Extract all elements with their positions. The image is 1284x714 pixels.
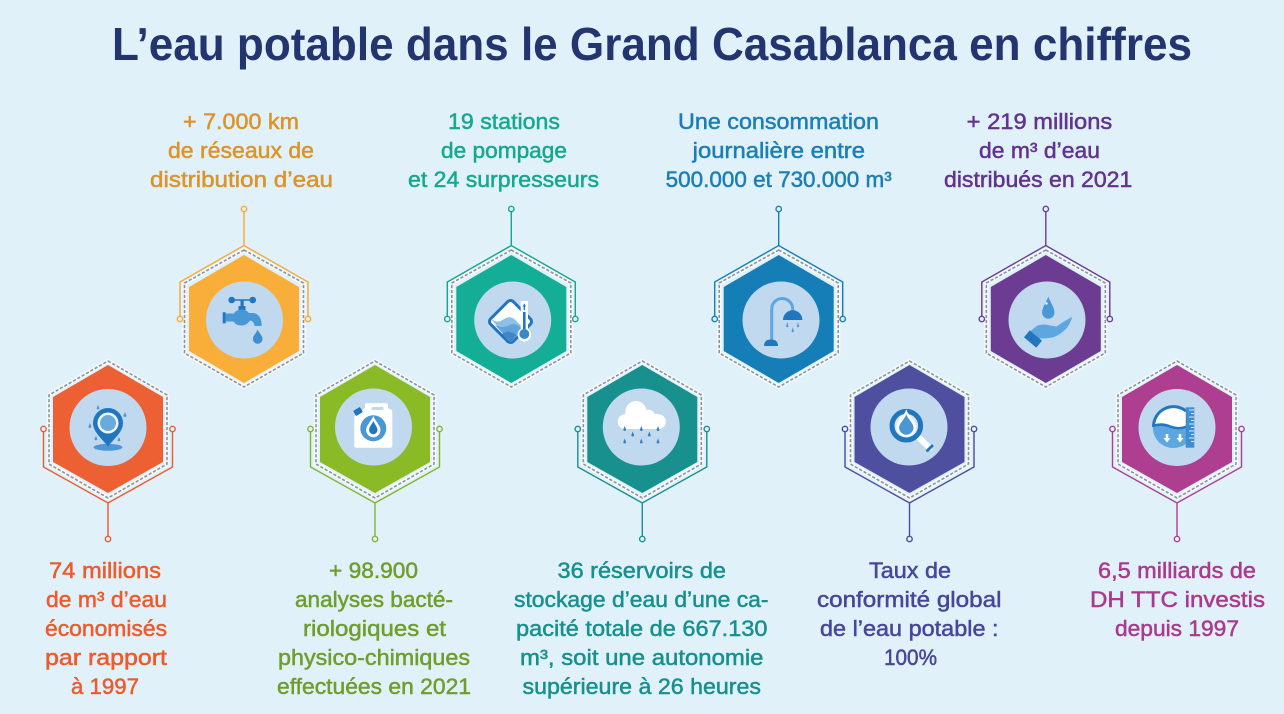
text: 219 millions: distribués en 2021	[944, 167, 1132, 192]
text: conformity rate: de l’eau potable :	[820, 616, 998, 641]
text: conformity rate	[817, 558, 1002, 670]
panel: analyses	[277, 361, 471, 699]
hexagon frame: amber	[177, 206, 311, 387]
icon: shower	[742, 282, 820, 358]
text: daily consumption: journalière entre	[692, 138, 865, 163]
icon: hand with drop	[1008, 282, 1086, 358]
text: 98.900 analyses	[277, 558, 471, 699]
text: 36 reservoirs: supérieure à 26 heures	[522, 674, 761, 699]
text: 36 reservoirs: m³, soit une autonomie	[520, 645, 764, 670]
hexagon frame: blue	[712, 206, 845, 387]
hexagon frame: red	[41, 361, 175, 542]
text: daily consumption: Une consommation	[678, 109, 879, 134]
icon: faucet	[206, 282, 283, 358]
text: 36 reservoirs: pacité totale de 667.130	[516, 616, 768, 641]
hexagon frame: teal	[445, 206, 578, 387]
text: 36 reservoirs: stockage d’eau d’une ca-	[514, 587, 768, 612]
text: 74 millions: par rapport	[45, 645, 167, 670]
text: 7.000 km: de réseaux de	[168, 138, 314, 163]
text: conformity rate: 100%	[884, 645, 937, 670]
text: 19 stations: de pompage	[441, 138, 567, 163]
text: 98.900 analyses: physico-chimiques	[278, 645, 470, 670]
text: 219 millions: + 219 millions	[967, 109, 1112, 134]
text: 74 millions: 74 millions	[49, 558, 161, 583]
text: 36 reservoirs	[514, 558, 768, 699]
icon: rain cloud	[603, 388, 680, 466]
text: 6,5 milliards	[1090, 558, 1265, 641]
text: 98.900 analyses: effectuées en 2021	[277, 674, 471, 699]
panel: water saved	[41, 361, 175, 699]
icon: jerrycan	[335, 388, 412, 466]
panel: conformity	[817, 361, 1002, 670]
text: conformity rate: Taux de	[869, 558, 951, 583]
text: 6,5 milliards: DH TTC investis	[1090, 587, 1265, 612]
text: 219 millions: de m³ d’eau	[979, 138, 1100, 163]
hexagon frame: green	[308, 361, 442, 542]
panel: daily consumption	[666, 109, 892, 387]
hexagon frame: dark teal	[575, 361, 710, 542]
text: 98.900 analyses: riologiques et	[303, 616, 446, 641]
icon: magnifier with drop	[870, 388, 948, 466]
text: conformity rate: conformité global	[817, 587, 1002, 612]
text: 19 stations: 19 stations	[448, 109, 560, 134]
icon: tank and thermometer	[474, 282, 551, 358]
text: 7.000 km: distribution d’eau	[150, 167, 333, 192]
text: 98.900 analyses: + 98.900	[329, 558, 418, 583]
hexagon frame: purple	[979, 206, 1112, 387]
text: 6,5 milliards: depuis 1997	[1115, 616, 1239, 641]
text: 74 millions: à 1997	[71, 674, 139, 699]
title: L’eau potable dans le Grand Casablanca en chiffres	[112, 18, 1192, 70]
panel: investment	[1090, 361, 1265, 641]
panel: network	[150, 109, 333, 387]
text: 19 stations	[408, 109, 599, 192]
text: 7.000 km: + 7.000 km	[183, 109, 299, 134]
text: 98.900 analyses: analyses bacté-	[295, 587, 453, 612]
text: 19 stations: et 24 surpresseurs	[408, 167, 599, 192]
text: 36 reservoirs: 36 réservoirs de	[558, 558, 726, 583]
text: 7.000 km	[150, 109, 333, 192]
text: daily consumption	[666, 109, 892, 192]
icon: map pin with water	[70, 389, 146, 466]
text: 74 millions: de m³ d’eau	[46, 587, 167, 612]
hexagon frame: indigo	[842, 361, 977, 542]
panel: water distributed	[944, 109, 1132, 387]
icon: water level gauge	[1138, 389, 1216, 466]
text: 74 millions: économisés	[45, 616, 167, 641]
text: 219 millions	[944, 109, 1132, 192]
text: daily consumption: 500.000 et 730.000 m³	[666, 167, 892, 192]
panel: reservoirs	[514, 361, 768, 699]
panel: pumping stations	[408, 109, 599, 387]
text: 74 millions	[45, 558, 167, 699]
hexagon frame: magenta	[1110, 361, 1244, 542]
text: 6,5 milliards: 6,5 milliards de	[1098, 558, 1256, 583]
